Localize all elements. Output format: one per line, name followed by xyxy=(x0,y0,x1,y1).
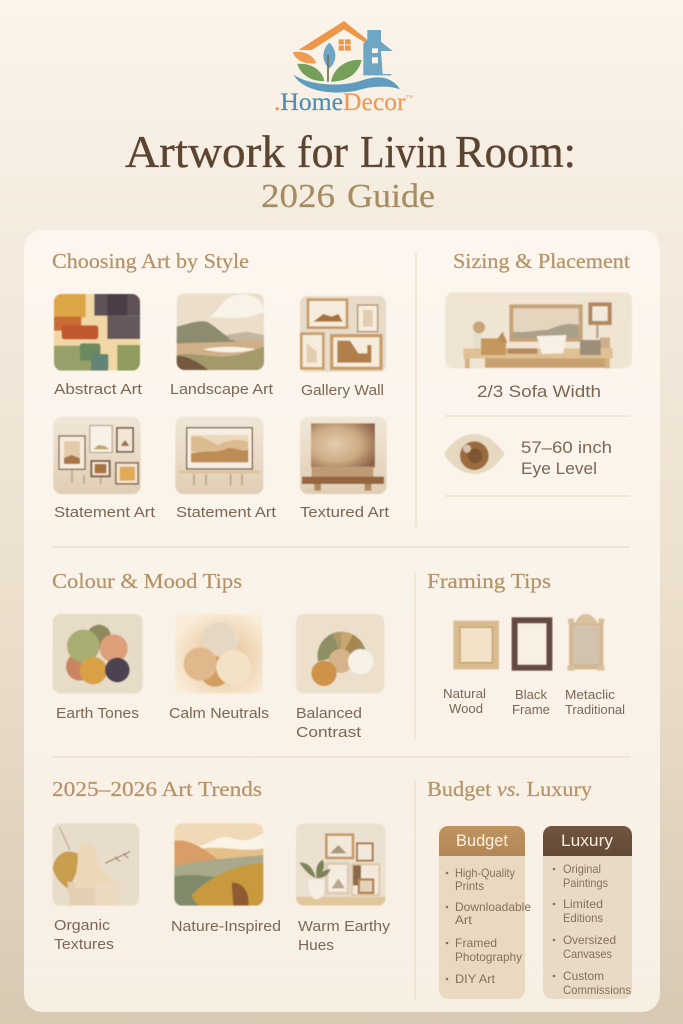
labels: style: Gallery Wall xyxy=(301,382,384,399)
image: statement art above bench xyxy=(175,417,263,494)
labels: style: Statement Art xyxy=(176,504,277,521)
image: organic textures xyxy=(52,823,139,906)
labels: colour: Balanced xyxy=(296,705,362,722)
panel: budget vs luxury xyxy=(427,777,632,999)
image: nature-inspired xyxy=(174,823,263,906)
swatch: balanced contrast xyxy=(296,614,384,693)
title: Artwork xyxy=(125,126,285,177)
card: budget: Art xyxy=(455,913,473,927)
card: budget: DIY Art xyxy=(455,972,496,986)
labels: style: Landscape Art xyxy=(170,381,274,398)
labels: frames: Frame xyxy=(512,702,550,717)
image: room scene with artwork xyxy=(445,292,632,368)
card: budget: High-Quality xyxy=(455,866,515,880)
labels: style: Statement Art xyxy=(54,504,156,521)
illustrations: sofa scene and eye xyxy=(444,292,632,474)
card: luxury: Paintings xyxy=(563,876,608,890)
image: abstract art xyxy=(54,294,140,371)
frame: natural wood xyxy=(453,621,499,669)
card: luxury: Commissions xyxy=(563,983,631,997)
panel: colour and mood tips xyxy=(52,569,384,741)
labels: trends: Textures xyxy=(54,936,114,953)
labels: frames: Black xyxy=(515,687,547,702)
heading: budget vs luxury: Budget vs. Luxury xyxy=(427,777,593,801)
title: Guide xyxy=(347,178,435,215)
labels: frames: Metaclic xyxy=(565,687,616,702)
logo: HomeDecor: ™ xyxy=(406,93,413,102)
image: landscape art xyxy=(177,293,264,370)
labels: style: Textured Art xyxy=(300,504,390,521)
heading: colour and mood: Colour & Mood Tips xyxy=(52,569,242,593)
labels: colour xyxy=(56,705,362,741)
labels: frames xyxy=(443,686,625,717)
labels: frames: Traditional xyxy=(565,702,625,717)
card: luxury: Limited xyxy=(563,897,603,911)
labels: colour: Calm Neutrals xyxy=(169,705,269,722)
labels: frames: Wood xyxy=(449,701,483,716)
title: Livin xyxy=(360,126,447,177)
labels: style: Abstract Art xyxy=(54,381,143,398)
heading: framing tips: Framing Tips xyxy=(427,569,551,593)
swatch: earth tones xyxy=(53,614,143,693)
heading: art trends: 2025–2026 Art Trends xyxy=(52,777,262,801)
label: eye level: 57–60 inch xyxy=(521,438,612,457)
card: luxury: Custom xyxy=(563,969,604,983)
image: gallery wall of statement art xyxy=(53,417,141,494)
panel: choosing art by style xyxy=(52,249,390,521)
trend images xyxy=(52,823,386,906)
panel: framing tips xyxy=(427,569,625,717)
heading: choosing art by style: Choosing Art by Style xyxy=(52,249,249,273)
card: luxury: Oversized xyxy=(563,933,616,947)
title: Room: xyxy=(455,126,576,177)
heading: sizing and placement: Sizing & Placement xyxy=(453,249,630,273)
labels: trends: Organic xyxy=(54,917,111,934)
swatches xyxy=(53,614,384,693)
image: textured art xyxy=(300,417,387,494)
labels: trends: Nature-Inspired xyxy=(171,918,281,935)
label: eye level: Eye Level xyxy=(521,459,597,478)
image: warm earthy hues xyxy=(296,823,386,906)
card: budget: Prints xyxy=(455,879,484,893)
labels: frames: Natural xyxy=(443,686,486,701)
frame: metallic traditional xyxy=(567,614,605,671)
labels: colour: Earth Tones xyxy=(56,705,139,722)
card: luxury: Canvases xyxy=(563,947,612,961)
swatch: calm neutrals xyxy=(175,614,262,693)
card: luxury: Original xyxy=(563,862,601,876)
labels: trends: Hues xyxy=(298,937,334,954)
image: gallery wall xyxy=(300,296,386,372)
title: for xyxy=(297,126,348,177)
labels: style xyxy=(54,381,390,521)
labels: colour: Contrast xyxy=(296,724,362,741)
card: luxury: Editions xyxy=(563,911,603,925)
label: sofa width: 2/3 Sofa Width xyxy=(477,382,601,401)
frames xyxy=(453,614,605,671)
card: budget: Framed xyxy=(455,936,497,950)
logo: HomeDecor xyxy=(274,21,413,116)
labels: trends xyxy=(54,917,391,954)
card: luxury xyxy=(543,826,632,999)
card: budget: Downloadable xyxy=(455,900,531,914)
artwork thumbnails: style xyxy=(53,293,387,494)
card: budget xyxy=(439,826,531,999)
card: luxury: Luxury xyxy=(561,831,614,850)
card: budget: Photography xyxy=(455,950,522,964)
title xyxy=(125,126,576,215)
main panel xyxy=(24,230,660,1012)
logo: HomeDecor: .HomeDecor xyxy=(274,89,404,116)
label: eye level xyxy=(521,438,612,478)
frame: black xyxy=(512,617,552,671)
card: budget: Budget xyxy=(456,831,508,850)
panel: art trends xyxy=(52,777,391,954)
icon: eye xyxy=(444,434,505,474)
title: 2026 xyxy=(261,178,335,215)
panel: sizing and placement xyxy=(444,249,632,478)
labels: trends: Warm Earthy xyxy=(298,918,391,935)
